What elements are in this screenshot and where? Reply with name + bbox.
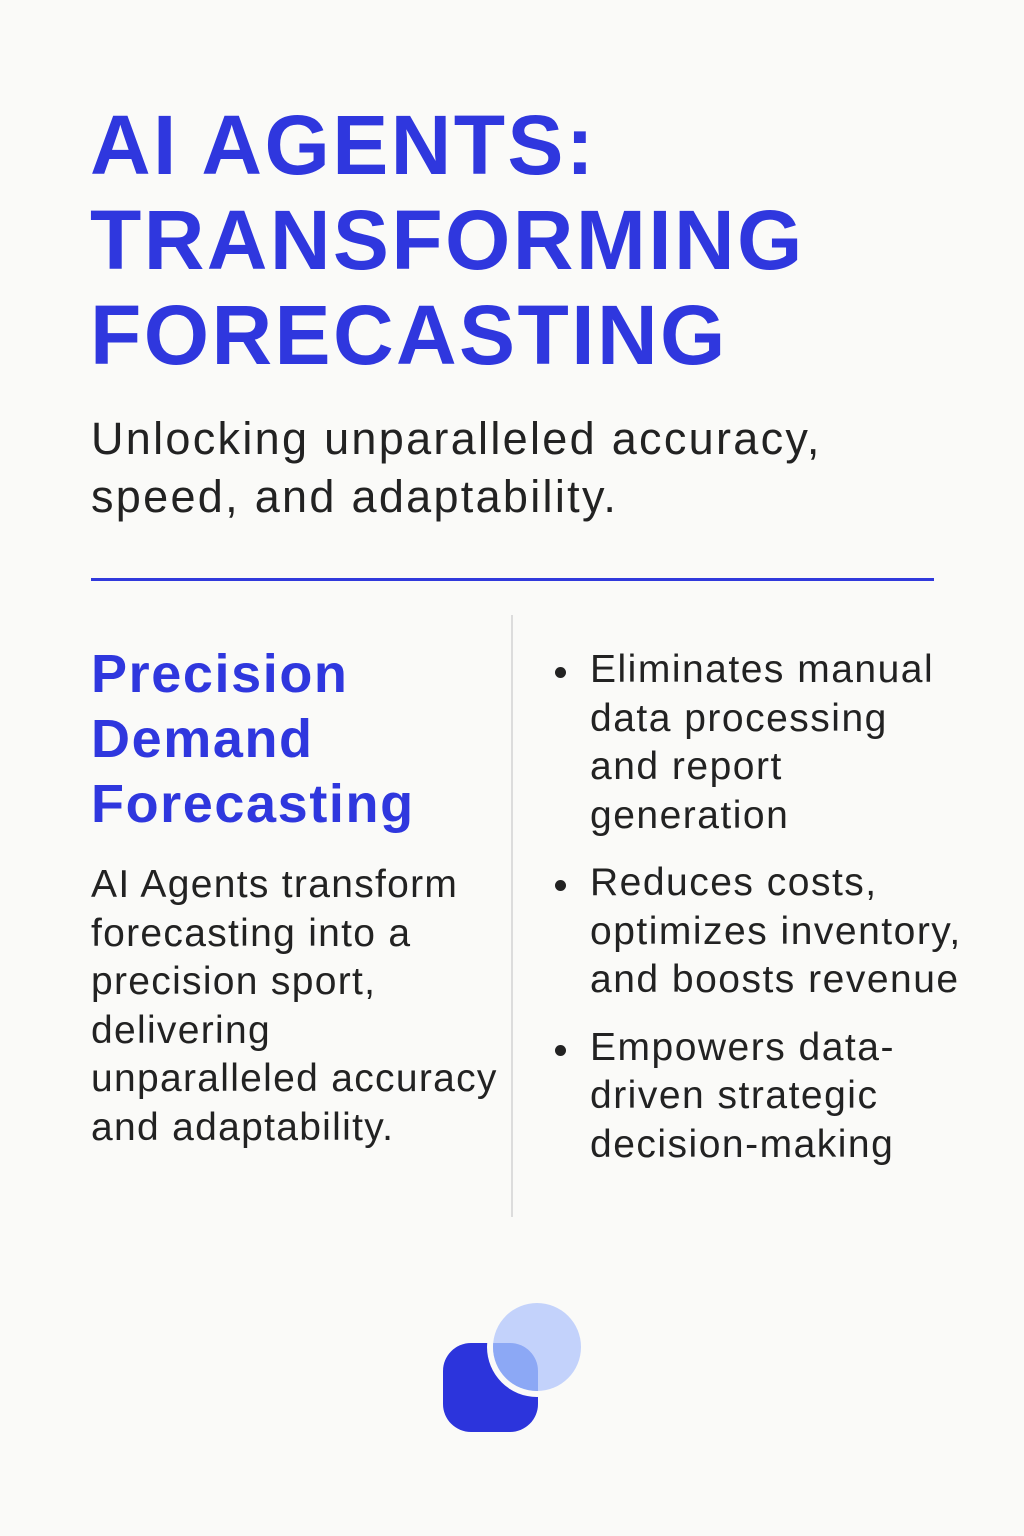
body text: unparalleled accuracy [91,1057,498,1100]
bullet 3: driven strategic [590,1074,878,1117]
section heading: Demand [91,709,314,769]
section heading [91,644,415,834]
subtitle [91,413,822,522]
bullet 2: Reduces costs, [590,861,878,904]
bullet 2: optimizes inventory, [590,910,962,952]
body text: precision sport, [91,960,376,1003]
bullet 3: decision-making [590,1122,894,1166]
bullet 1: Eliminates manual [590,648,934,691]
section heading: Forecasting [91,774,415,834]
bullet 1 [550,646,1020,840]
section heading: Precision [91,644,349,704]
bullet 2: and boosts revenue [590,958,960,1001]
subtitle: speed, and adaptability. [91,471,618,522]
title: FORECASTING [90,288,728,382]
title: TRANSFORMING [90,193,805,287]
bullet 3 [550,1024,1020,1169]
subtitle: Unlocking unparalleled accuracy, [91,413,822,464]
title: AI AGENTS: [90,98,596,192]
bullet list [555,648,962,1166]
body text: and adaptability. [91,1106,394,1148]
body text: forecasting into a [91,912,411,954]
bullet 1: and report [590,745,783,788]
bullet 1: generation [590,794,789,836]
body text: delivering [91,1008,271,1052]
bullet 1: data processing [590,696,888,740]
body text: AI Agents transform [91,863,458,906]
title [90,98,805,382]
bullet 2 [550,859,1020,1004]
icon: logo [443,1303,581,1432]
bullet 3: Empowers data- [590,1026,895,1068]
body text [91,863,498,1148]
